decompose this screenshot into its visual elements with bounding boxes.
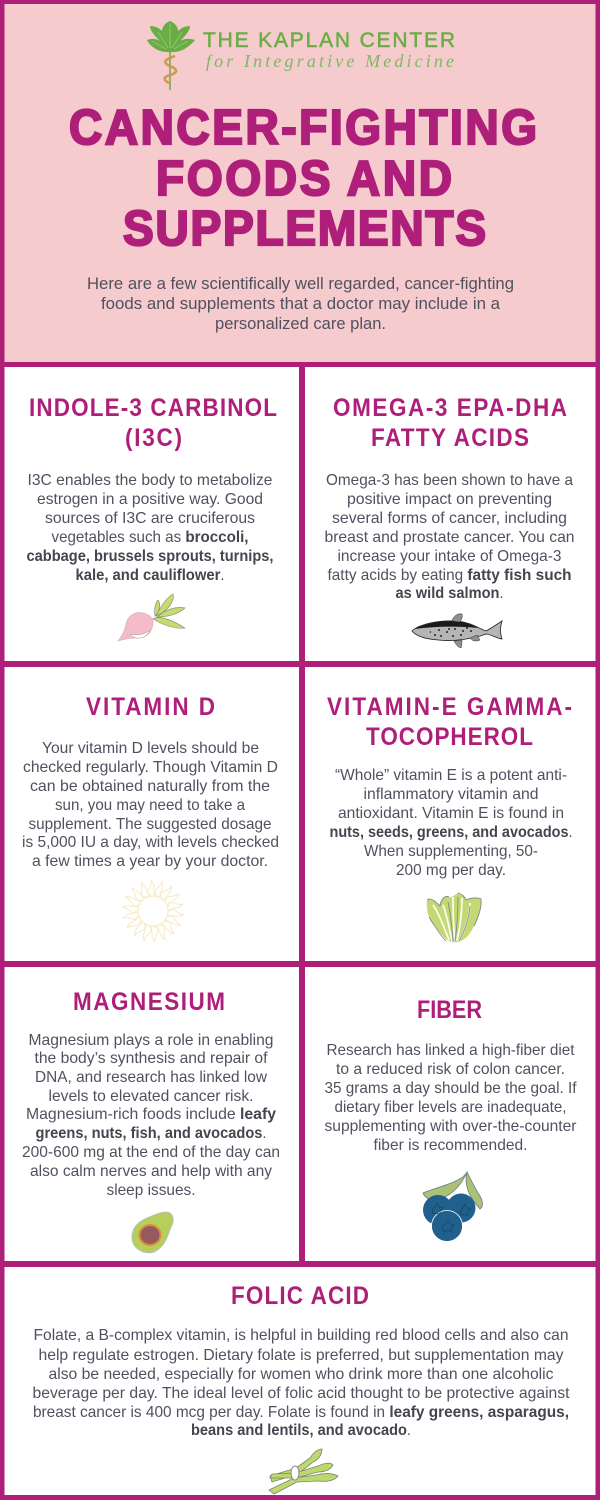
body text: increase your intake of Omega-3 — [338, 548, 562, 565]
logo tagline: for Integrative Medicine — [206, 51, 454, 71]
heading: OMEGA-3 EPA-DHA — [333, 394, 567, 421]
icon: lotus and staff — [147, 21, 195, 90]
title: FOODS AND — [156, 152, 452, 206]
body text: levels to elevated cancer risk. — [48, 1088, 254, 1105]
body text: Omega-3 has been shown to have a — [326, 472, 573, 489]
body text: as wild salmon. — [396, 585, 504, 602]
intro text: personalized care plan. — [215, 314, 386, 333]
body text — [324, 1042, 577, 1154]
body text: 200-600 mg at the end of the day can — [22, 1144, 280, 1161]
body text: fatty acids by eating fatty fish such — [328, 567, 572, 584]
body text — [32, 1327, 570, 1439]
heading: INDOLE-3 CARBINOL — [29, 394, 277, 421]
logo name: THE KAPLAN CENTER — [203, 29, 455, 52]
heading: TOCOPHEROL — [366, 723, 533, 750]
logo — [147, 21, 455, 90]
body text: checked regularly. Though Vitamin D — [23, 759, 278, 776]
heading: VITAMIN D — [86, 693, 215, 720]
heading — [29, 394, 277, 451]
panel: vitamin d — [4, 667, 299, 961]
body text: sun, you may need to take a — [55, 797, 245, 814]
icon: sun — [122, 880, 184, 942]
panel: header — [4, 4, 596, 362]
body text: Your vitamin D levels should be — [42, 740, 259, 757]
body text: Magnesium plays a role in enabling — [28, 1032, 274, 1049]
panel: folic acid — [4, 1267, 596, 1495]
body text: When supplementing, 50- — [364, 843, 538, 860]
body text: antioxidant. Vitamin E is found in — [338, 805, 564, 822]
body text: DNA, and research has linked low — [35, 1069, 267, 1086]
body text: 35 grams a day should be the goal. If — [324, 1080, 577, 1097]
panel: indole-3 carbinol — [4, 367, 299, 661]
heading: FOLIC ACID — [231, 1282, 369, 1309]
body text: “Whole” vitamin E is a potent anti- — [335, 767, 567, 784]
body text: dietary fiber levels are inadequate, — [334, 1099, 566, 1116]
body text: beans and lentils, and avocado. — [191, 1422, 411, 1439]
body text: Magnesium-rich foods include leafy — [26, 1106, 276, 1123]
body text: Folate, a B-complex vitamin, is helpful in building red blood cells and also can — [34, 1327, 568, 1344]
heading: (I3C) — [125, 424, 182, 451]
body text: also calm nerves and help with any — [30, 1163, 272, 1180]
body text: to a reduced risk of colon cancer. — [336, 1061, 565, 1078]
body text: I3C enables the body to metabolize — [28, 472, 273, 489]
panel: omega-3 — [305, 367, 596, 661]
body text: breast cancer is 400 mcg per day. Folate is found in leafy greens, asparagus, — [33, 1404, 569, 1421]
body text: sources of I3C are cruciferous — [45, 510, 255, 527]
title: SUPPLEMENTS — [123, 202, 486, 256]
heading — [333, 394, 567, 451]
heading: FATTY ACIDS — [371, 424, 529, 451]
body text — [26, 472, 274, 584]
intro text: foods and supplements that a doctor may include in a — [101, 294, 501, 313]
heading: VITAMIN-E GAMMA- — [327, 693, 572, 720]
body text: breast and prostate cancer. You can — [324, 529, 574, 546]
body text: supplement. The suggested dosage — [28, 816, 272, 833]
body text: fiber is recommended. — [374, 1137, 528, 1154]
heading — [327, 693, 572, 750]
icon: lettuce — [427, 893, 481, 942]
body text: Research has linked a high-fiber diet — [326, 1042, 575, 1059]
icon: asparagus — [269, 1449, 338, 1494]
body text: inflammatory vitamin and — [364, 786, 538, 803]
body text: kale, and cauliflower. — [76, 567, 224, 584]
body text — [330, 767, 572, 879]
body text: supplementing with over-the-counter — [324, 1118, 577, 1135]
body text: sleep issues. — [106, 1182, 196, 1199]
body text: help regulate estrogen. Dietary folate is preferred, but supplementation may — [38, 1347, 564, 1364]
body text: the body’s synthesis and repair of — [34, 1050, 268, 1067]
intro text: Here are a few scientifically well regarded, cancer-fighting — [87, 274, 514, 293]
heading: FIBER — [417, 996, 482, 1023]
body text: cabbage, brussels sprouts, turnips, — [26, 548, 274, 565]
intro text — [87, 274, 514, 333]
icon: fish — [412, 614, 502, 648]
panel: fiber — [305, 967, 596, 1261]
body text — [22, 1032, 280, 1199]
body text: also be needed, especially for women who drink more than one alcoholic — [48, 1366, 554, 1383]
body text: can be obtained naturally from the — [30, 778, 270, 795]
body text: is 5,000 IU a day, with levels checked — [22, 834, 279, 851]
body text: a few times a year by your doctor. — [32, 853, 268, 870]
title: CANCER-FIGHTING — [69, 101, 537, 155]
icon: radish — [118, 594, 185, 641]
body text: positive impact on preventing — [347, 491, 552, 508]
icon: avocado — [132, 1212, 173, 1253]
body text — [22, 740, 279, 870]
body text: 200 mg per day. — [396, 862, 506, 879]
body text: vegetables such as broccoli, — [52, 529, 248, 546]
body text: nuts, seeds, greens, and avocados. — [330, 824, 572, 841]
panel: vitamin e — [305, 667, 596, 961]
body text: estrogen in a positive way. Good — [37, 491, 263, 508]
body text — [324, 472, 574, 602]
icon: blueberries — [423, 1172, 482, 1242]
body text: greens, nuts, fish, and avocados. — [36, 1125, 266, 1142]
panel: magnesium — [4, 967, 299, 1261]
body text: beverage per day. The ideal level of folic acid thought to be protective against — [32, 1385, 570, 1402]
title — [69, 101, 537, 256]
heading: MAGNESIUM — [73, 988, 225, 1015]
body text: several forms of cancer, including — [332, 510, 567, 527]
